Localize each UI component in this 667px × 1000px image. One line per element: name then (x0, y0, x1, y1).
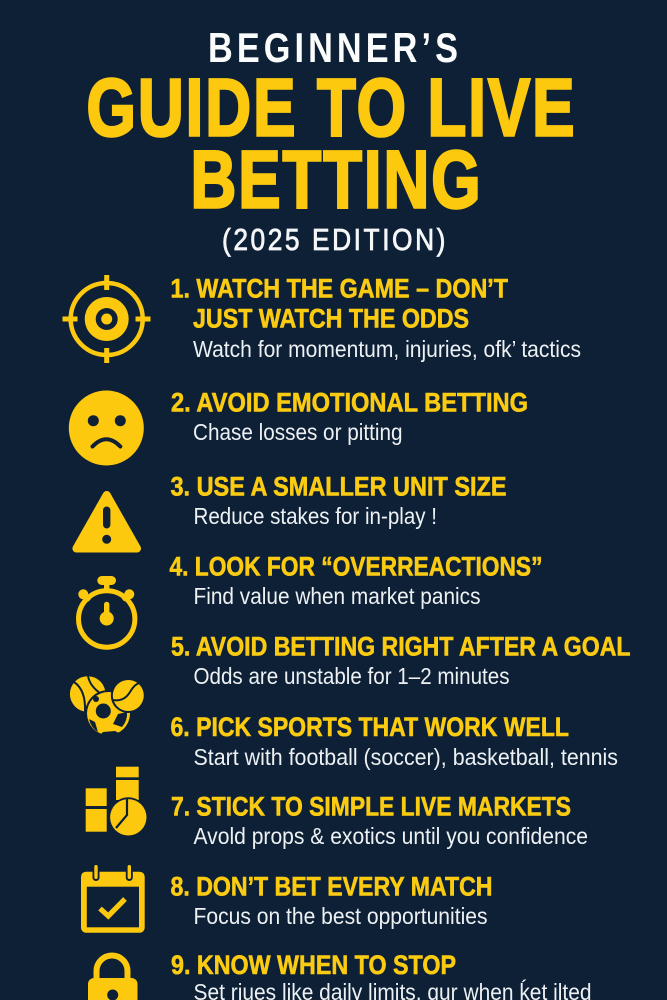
tip 7 heading: 7. STICK TO SIMPLE LIVE MARKETS (171, 792, 571, 822)
icon: warning triangle (76, 495, 137, 548)
left tennis ball (70, 676, 106, 712)
icon: calendar with check (81, 863, 145, 933)
tip 1 heading (170, 274, 508, 334)
tip 5 (171, 632, 630, 689)
kicker: beginner's: BEGINNER’S (208, 24, 462, 71)
tip 9 heading: 9. KNOW WHEN TO STOP (171, 950, 456, 980)
tip 6 text: Start with football (soccer), basketball, tennis (194, 744, 618, 770)
tip 1 (170, 274, 581, 362)
tip 7 (171, 792, 588, 849)
icon: bars and pie (86, 767, 148, 837)
title block (86, 24, 576, 257)
title line: betting: BETTING (190, 134, 482, 226)
icon: padlock (88, 956, 138, 1000)
tip 4 text: Find value when market panics (194, 583, 480, 609)
right tennis ball (111, 678, 146, 713)
tip 4 (170, 552, 542, 609)
tip 8 (170, 872, 492, 929)
tip 6 heading: 6. PICK SPORTS THAT WORK WELL (170, 712, 569, 742)
edition subtitle: (2025 EDITION) (222, 222, 448, 257)
tip 1 heading: 1. WATCH THE GAME – DON’T (170, 274, 508, 304)
soccer ball (85, 690, 132, 737)
tip 2 text: Chase losses or pitting (193, 419, 402, 445)
tip 6 (170, 712, 618, 770)
tip 1 text: Watch for momentum, injuries, ofk’ tactics (193, 336, 581, 362)
tip 5 text: Odds are unstable for 1–2 minutes (194, 663, 510, 689)
icon: stopwatch (78, 576, 135, 647)
tip 3 text: Reduce stakes for in-play ! (194, 503, 437, 529)
tip 9 (171, 950, 592, 1000)
tip 2 heading: 2. AVOID EMOTIONAL BETTING (171, 388, 528, 418)
icon: sports balls (70, 676, 146, 737)
tip 8 text: Focus on the best opportunities (194, 903, 488, 929)
tip 8 heading: 8. DON’T BET EVERY MATCH (170, 872, 492, 902)
tip 2 (171, 388, 528, 445)
tip 3 (170, 472, 506, 529)
tip 7 text: Avold props & exotics until you confidence (194, 823, 588, 849)
tip 3 heading: 3. USE A SMALLER UNIT SIZE (170, 472, 506, 502)
icon: target (62, 275, 150, 363)
tip 1 heading: JUST WATCH THE ODDS (193, 304, 469, 334)
icon: sad face (69, 390, 144, 466)
tip 4 heading: 4. LOOK FOR “OVERREACTIONS” (170, 552, 542, 582)
